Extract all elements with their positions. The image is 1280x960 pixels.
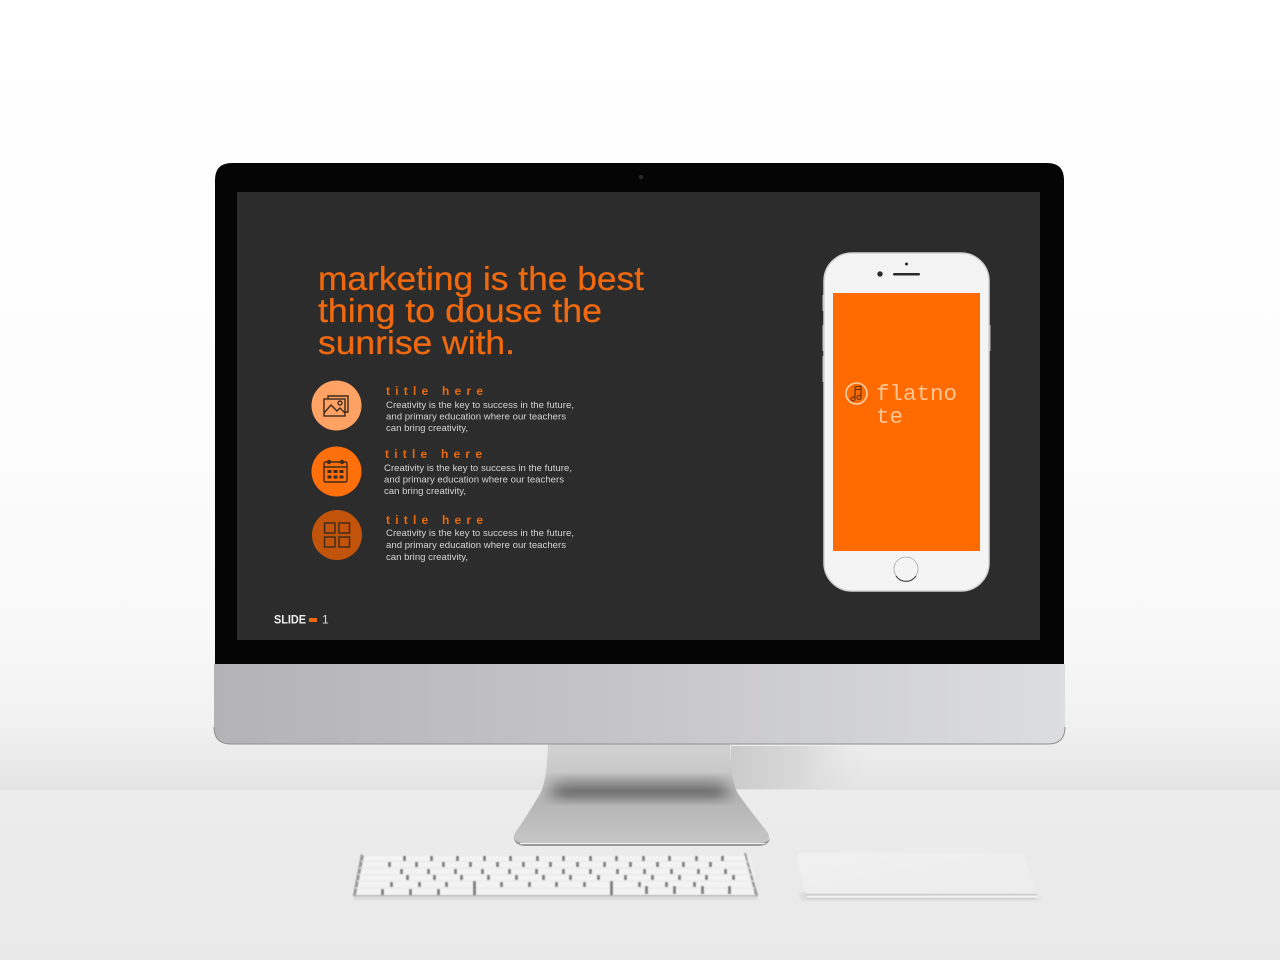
keyboard key gaps <box>381 856 735 895</box>
item 3 description: and primary education where our teachers <box>386 540 566 551</box>
slide number: 1 <box>322 612 329 626</box>
icon: calendar <box>312 446 362 496</box>
heading: marketing is the best <box>318 260 644 297</box>
list item 1 <box>312 380 574 434</box>
trackpad <box>797 853 1042 900</box>
logo text <box>876 381 957 430</box>
heading: thing to douse the <box>318 292 602 329</box>
item 3 description: can bring creativity, <box>386 552 468 563</box>
camera <box>639 175 643 179</box>
item 1 description: Creativity is the key to success in the future, <box>386 400 574 411</box>
item 2 title: title here <box>385 447 482 461</box>
logo: music note icon <box>846 383 867 404</box>
logo text: te <box>876 404 903 430</box>
stand shadow on wall <box>731 746 871 789</box>
keyboard row lines <box>355 862 755 888</box>
list item 3 <box>312 510 574 563</box>
item 3 description: Creativity is the key to success in the future, <box>386 528 574 539</box>
icon: picture <box>312 380 362 430</box>
slide screen <box>237 192 1040 640</box>
phone side buttons <box>822 295 990 382</box>
heading <box>318 260 644 361</box>
item 3 title: title here <box>386 513 483 527</box>
phone body <box>824 253 989 591</box>
item 2 description: Creativity is the key to success in the future, <box>384 463 572 474</box>
monitor chin <box>214 664 1065 744</box>
item 3 description <box>386 528 574 563</box>
item 2 description <box>384 463 572 497</box>
home button <box>894 557 918 581</box>
heading: sunrise with. <box>318 324 515 361</box>
logo text: flatno <box>876 381 957 407</box>
background: desk <box>0 790 1280 960</box>
item 1 description: can bring creativity, <box>386 423 468 434</box>
phone <box>822 253 990 591</box>
icon: grid <box>312 510 362 560</box>
item 1 description: and primary education where our teachers <box>386 412 566 422</box>
list item 2 <box>312 446 572 497</box>
item 2 description: and primary education where our teachers <box>384 474 564 486</box>
monitor <box>214 163 1065 744</box>
item 1 description <box>386 400 574 434</box>
phone screen <box>833 293 980 551</box>
item 1 title: title here <box>386 384 483 398</box>
monitor stand <box>514 744 770 846</box>
slide number <box>274 612 329 626</box>
keyboard base <box>353 856 758 896</box>
keyboard side edges <box>353 853 758 895</box>
item 2 description: can bring creativity, <box>384 486 466 497</box>
monitor bezel <box>215 163 1064 664</box>
slide number: SLIDE <box>274 612 306 626</box>
phone earpiece and camera <box>877 262 920 277</box>
keyboard <box>353 853 758 900</box>
